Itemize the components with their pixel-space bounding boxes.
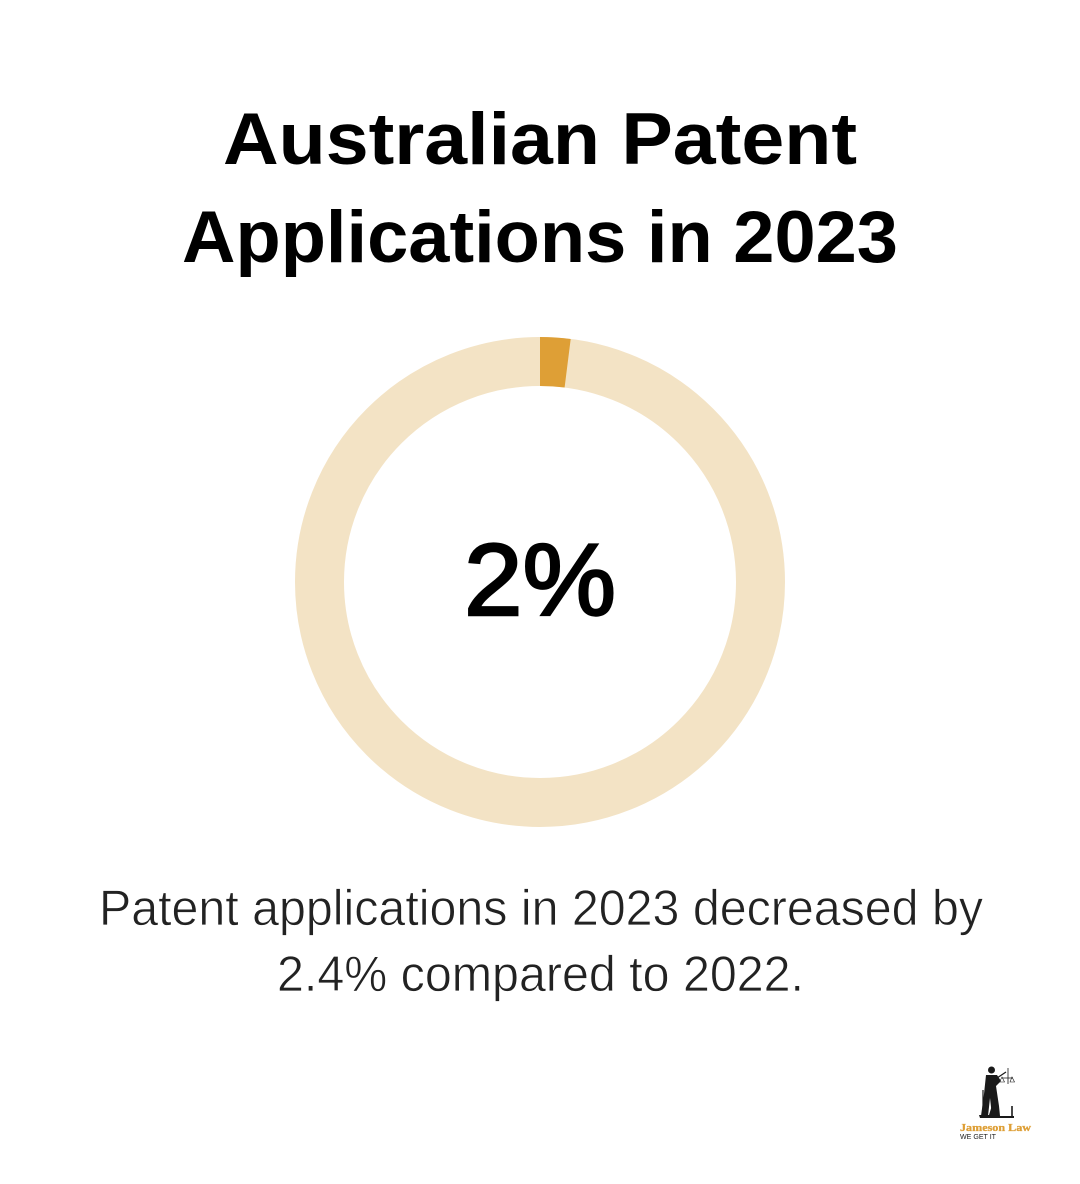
title <box>182 99 898 278</box>
description text: Patent applications in 2023 decreased by <box>99 880 983 936</box>
center value: 2% <box>464 523 616 637</box>
title: Australian Patent <box>223 99 857 180</box>
title: Applications in 2023 <box>182 197 898 278</box>
logo tagline: WE GET IT <box>960 1134 997 1141</box>
icon: lady justice figure <box>979 1066 1014 1118</box>
description text: 2.4% compared to 2022. <box>277 946 804 1002</box>
logo: Jameson Law <box>960 1066 1031 1141</box>
logo name: Jameson Law <box>960 1123 1031 1134</box>
description text <box>99 880 983 1002</box>
donut chart: 2% <box>320 337 760 802</box>
